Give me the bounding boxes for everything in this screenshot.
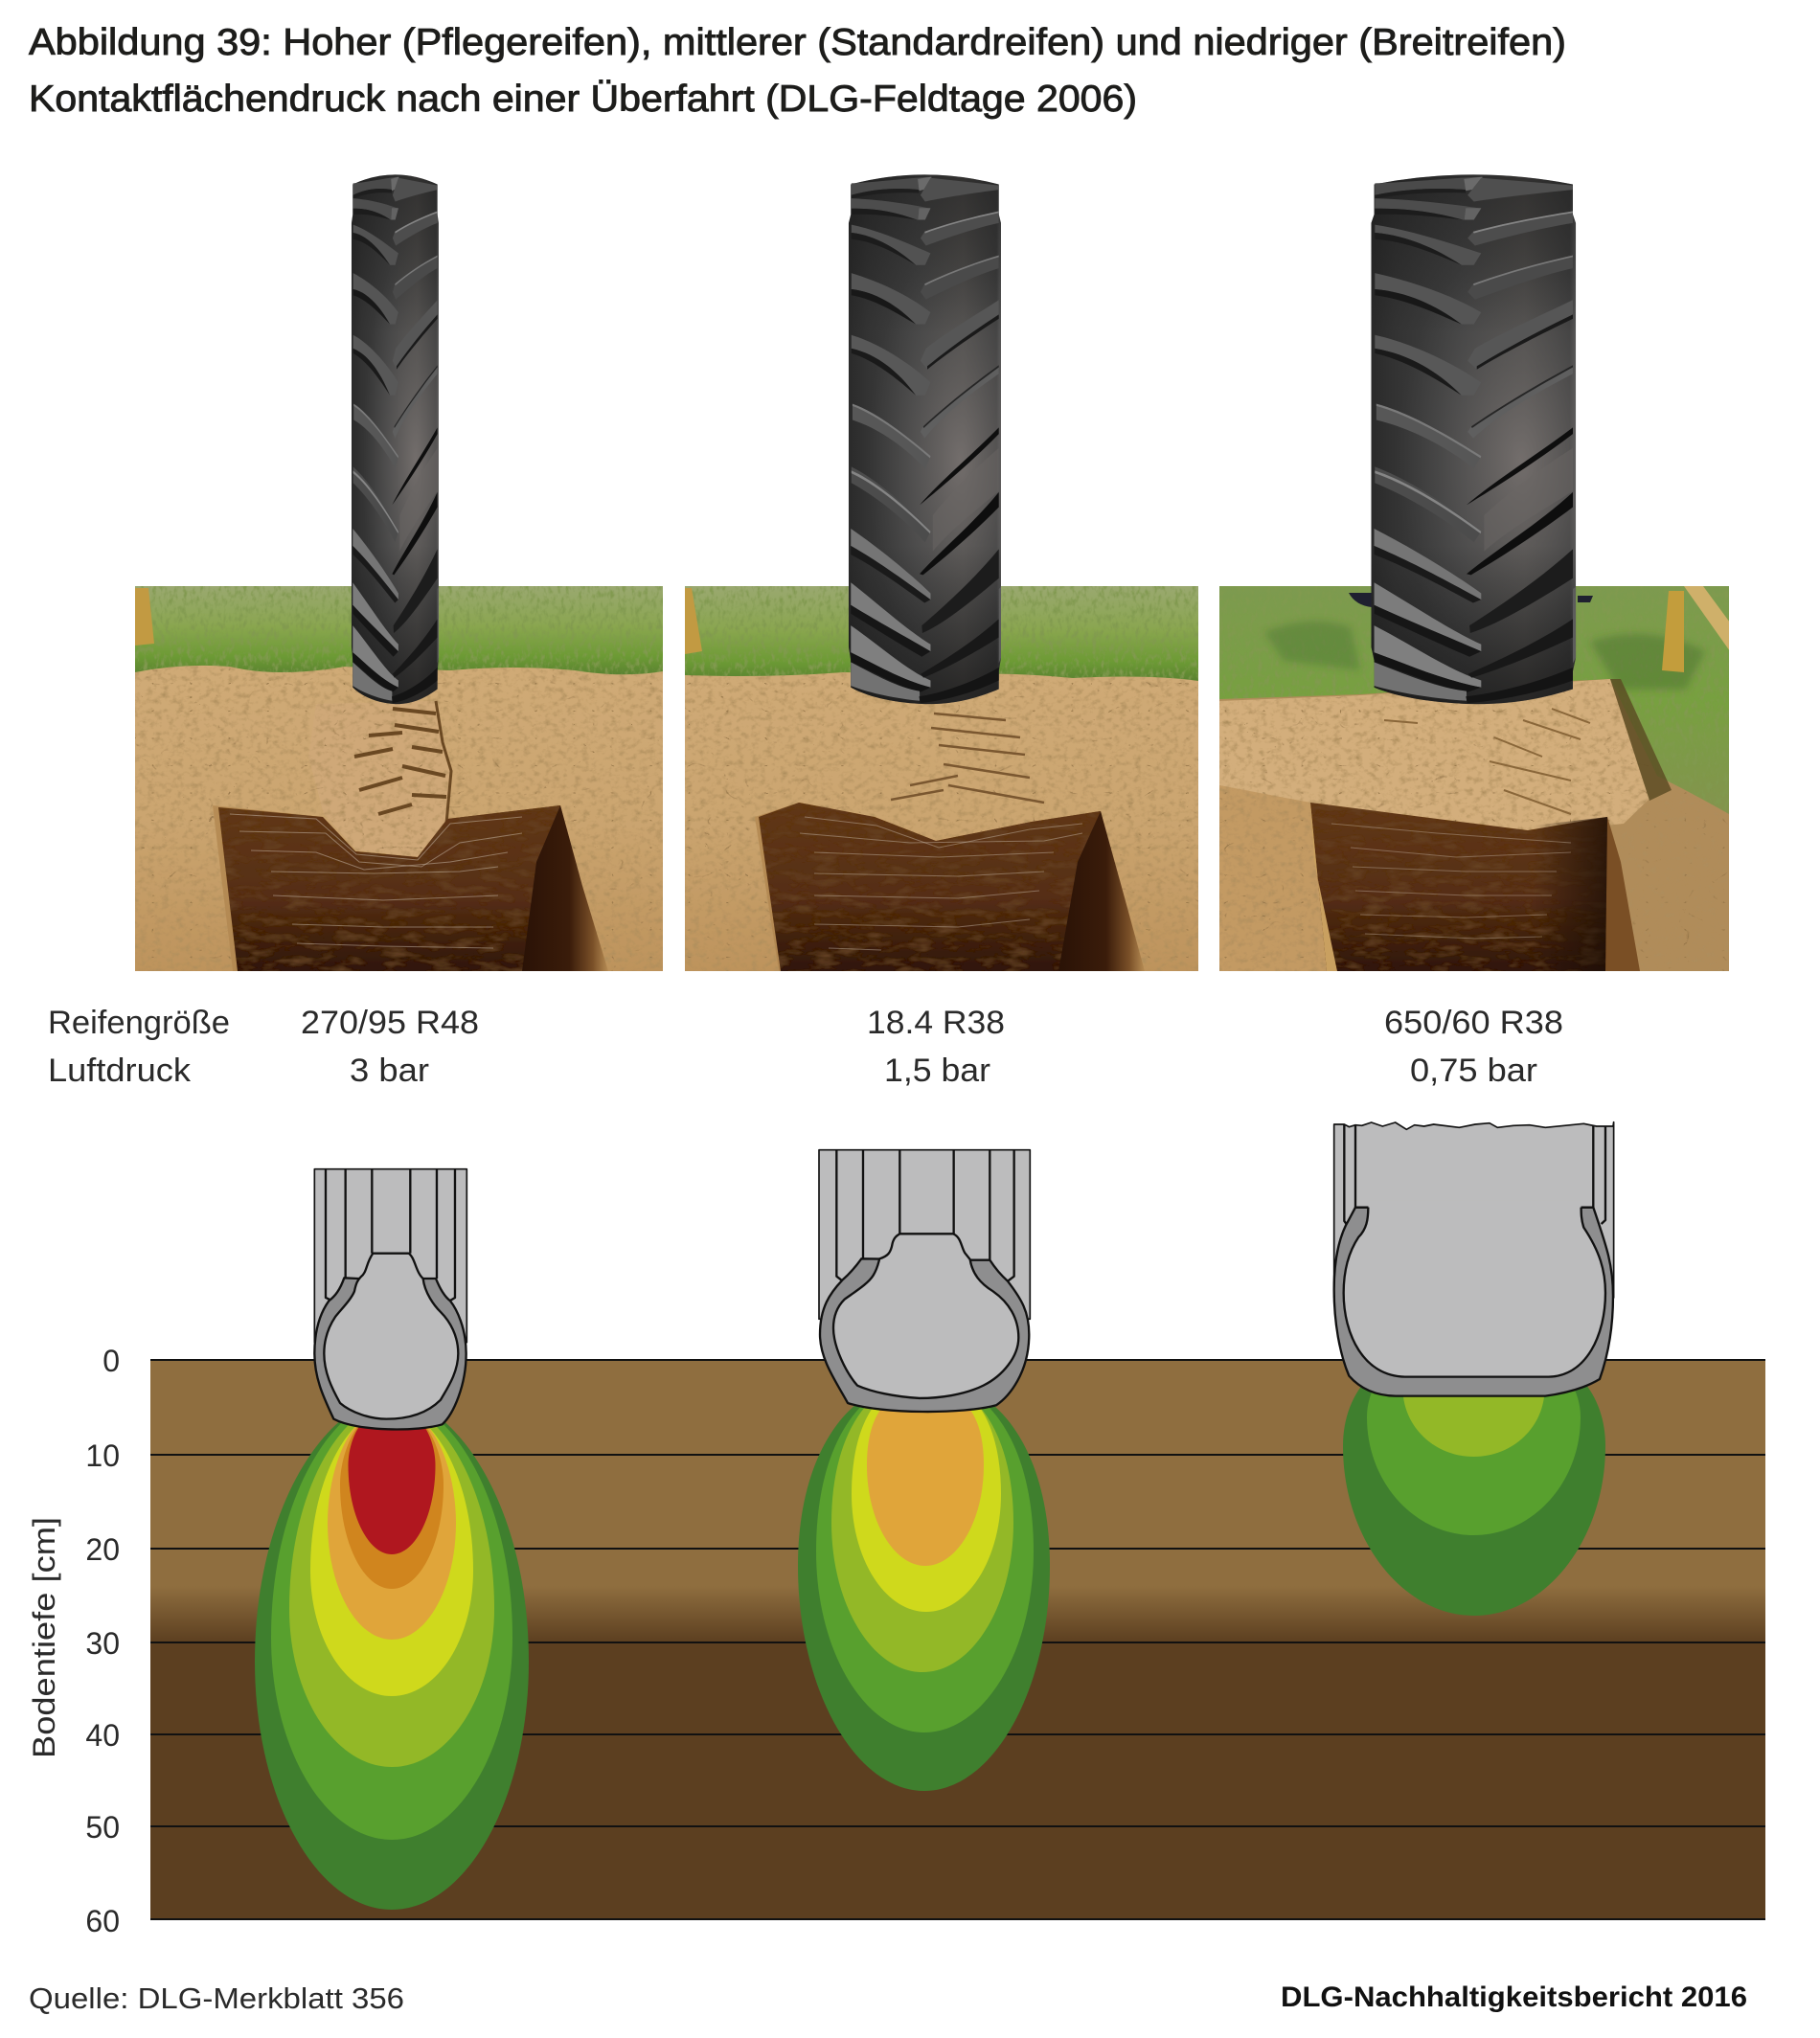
- tyre tread view: narrow tyre: [352, 174, 439, 704]
- pit: [213, 805, 604, 971]
- wheel track: [1384, 709, 1590, 814]
- tyre tread view: standard tyre: [849, 174, 1001, 704]
- wheel track: [891, 713, 1044, 803]
- air pressure values: 1,5 bar: [884, 1053, 990, 1089]
- tyre cross-section: low pressure: [1334, 1122, 1614, 1396]
- air pressure values: [350, 1053, 1537, 1089]
- panel: photo of soil pit under wide tyre: [1219, 586, 1730, 971]
- depth axis title: Bodentiefe [cm]: [27, 1517, 61, 1758]
- depth axis labels: 50: [85, 1810, 120, 1845]
- pressure bulb: high pressure: [255, 1398, 529, 1910]
- depth axis labels: 0: [102, 1344, 120, 1378]
- tyre size values: 18.4 R38: [867, 1005, 1005, 1041]
- tyre cross-section: medium pressure: [819, 1150, 1030, 1412]
- tyre tread view: wide tyre: [1371, 174, 1576, 704]
- boots in background: [1349, 593, 1593, 607]
- pressure bulb: medium pressure: [798, 1379, 1050, 1791]
- depth axis labels: [85, 1344, 120, 1938]
- title: [29, 22, 1566, 120]
- tyre size values: [301, 1005, 1563, 1041]
- depth axis labels: 40: [85, 1718, 120, 1753]
- pressure bulb: low pressure: [1343, 1341, 1605, 1616]
- pit: [1310, 803, 1609, 971]
- depth axis labels: 20: [85, 1532, 120, 1567]
- fence post: [1662, 591, 1684, 672]
- tyre data table: [48, 1005, 1563, 1089]
- depth axis labels: 10: [85, 1438, 120, 1473]
- fence log: [1684, 586, 1730, 651]
- wheel track: [308, 701, 451, 857]
- tyre size values: 270/95 R48: [301, 1005, 479, 1041]
- air pressure values: 3 bar: [350, 1053, 429, 1089]
- depth axis labels: 60: [85, 1904, 120, 1938]
- panel: photo of soil pit under standard tyre: [685, 586, 1198, 971]
- tyre size values: 650/60 R38: [1384, 1005, 1563, 1041]
- air pressure values: 0,75 bar: [1410, 1053, 1537, 1089]
- pit: [755, 803, 1141, 971]
- publication credit: DLG-Nachhaltigkeitsbericht 2016: [1281, 1981, 1747, 2013]
- depth axis labels: 30: [85, 1626, 120, 1661]
- chart: soil depth background: [150, 1360, 1765, 1919]
- title: Kontaktflächendruck nach einer Überfahrt (DLG-Feldtage 2006): [29, 79, 1137, 120]
- source note: Quelle: DLG-Merkblatt 356: [29, 1981, 404, 2015]
- row label: tyre size: Reifengröße: [48, 1005, 230, 1041]
- row label: air pressure: Luftdruck: [48, 1053, 192, 1089]
- title: Abbildung 39: Hoher (Pflegereifen), mittlerer (Standardreifen) und niedriger (Breitreifen): [29, 22, 1566, 63]
- panel: photo of soil pit under high pressure tyre: [135, 586, 663, 971]
- tyre cross-section: high pressure: [314, 1169, 466, 1429]
